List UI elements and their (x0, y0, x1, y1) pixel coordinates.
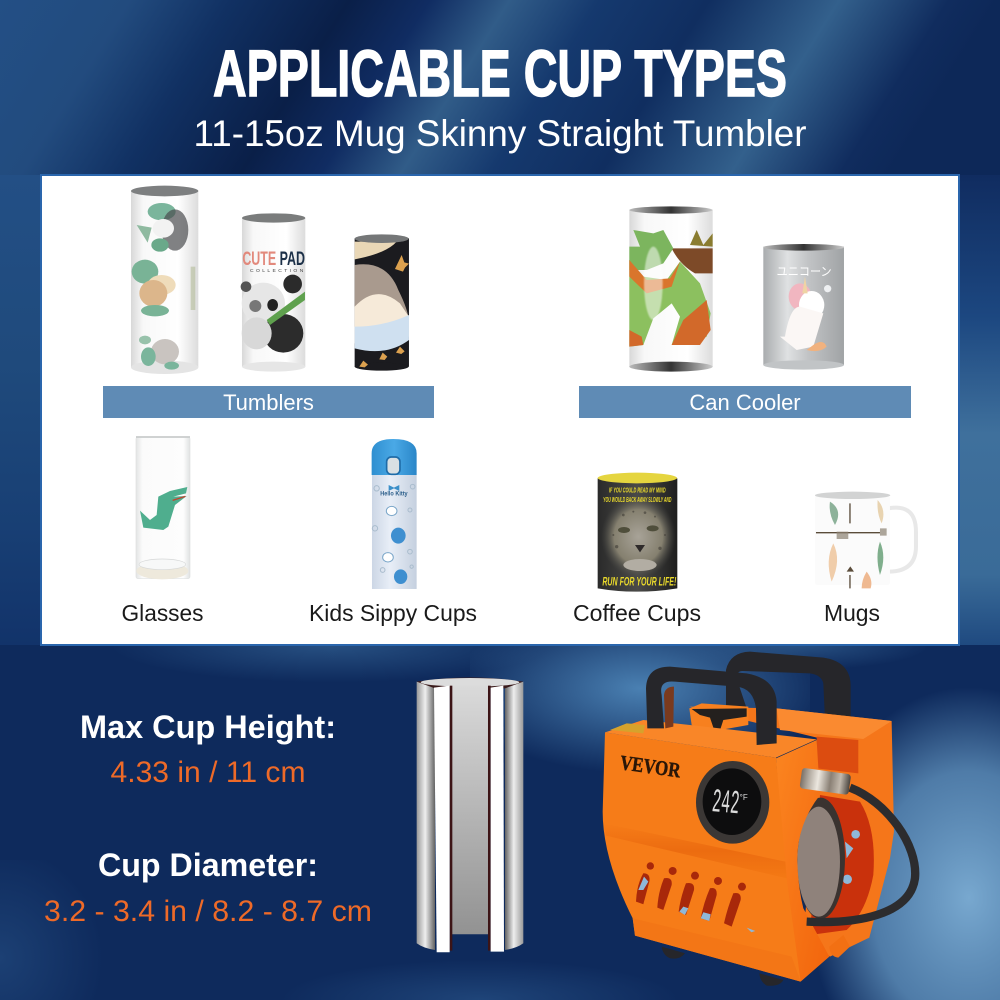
feet (662, 947, 783, 986)
top surface (605, 720, 817, 758)
coffee cup with snow leopard: YOU WOULD BACK AWAY SLOWLY AND (603, 495, 672, 504)
glass with crocodile (136, 437, 190, 579)
label: kids sippy cups: Kids Sippy Cups (309, 600, 477, 626)
cable (807, 788, 915, 922)
back plate top (777, 708, 892, 739)
vents (636, 862, 746, 927)
connector (799, 768, 851, 795)
bracket (689, 703, 748, 732)
can cooler: unicorn (763, 244, 844, 370)
panel: cup types (41, 175, 959, 645)
body side face (776, 740, 829, 982)
can cooler: green character (629, 206, 713, 372)
cup diameter value: 3.2 - 3.4 in / 8.2 - 8.7 cm (44, 895, 372, 928)
max cup height value: 4.33 in / 11 cm (110, 756, 306, 789)
body front face (603, 732, 801, 982)
tumbler: cute panda (241, 213, 305, 372)
hinge (829, 935, 850, 958)
tumbler: jungle animals (131, 186, 198, 374)
back plate (689, 707, 894, 957)
vent see-through highlights (638, 877, 755, 932)
cup diameter heading: Cup Diameter: (98, 847, 318, 883)
mug with arrows (815, 492, 916, 588)
label: mugs: Mugs (824, 600, 880, 626)
control dial (696, 761, 769, 844)
subtitle: 11-15oz Mug Skinny Straight Tumbler (194, 113, 806, 154)
kids sippy bottle (372, 439, 417, 589)
slot opening (817, 737, 858, 773)
can cooler label bar: Can Cooler (689, 390, 801, 415)
handle inner shade (664, 687, 674, 728)
tumblers label bar (103, 386, 434, 418)
tumbler: night child (355, 234, 409, 371)
VEVOR logo: VEVOR (619, 752, 683, 783)
warning label (610, 723, 645, 733)
tumbler: cute panda: COLLECTION (250, 268, 304, 274)
labels: glasses: Glasses (122, 600, 204, 626)
tumbler: cute panda: CUTE PAD (242, 249, 305, 270)
tumblers label bar: Tumblers (223, 390, 314, 415)
back handle (726, 652, 851, 719)
control dial: 242 (710, 784, 741, 824)
heat press sleeve (417, 677, 523, 952)
coffee cup with snow leopard (598, 473, 677, 592)
coffee cup with snow leopard: IF YOU COULD READ MY MIND (609, 485, 666, 494)
can cooler: unicorn: ユニコーン (777, 264, 832, 278)
heat press machine (603, 652, 915, 986)
heat plate opening (810, 795, 874, 935)
heat pad (796, 798, 845, 919)
front handle (646, 667, 777, 745)
chamfer (633, 918, 801, 982)
face band (604, 823, 787, 878)
can cooler label bar (579, 386, 911, 418)
max cup height heading: Max Cup Height: (80, 709, 336, 745)
coffee cup with snow leopard: RUN FOR YOUR LIFE! (602, 574, 676, 588)
lever (692, 708, 747, 732)
kids sippy bottle: Hello Kitty (380, 491, 408, 498)
label: coffee cups: Coffee Cups (573, 600, 701, 626)
control dial: °F (740, 793, 748, 802)
